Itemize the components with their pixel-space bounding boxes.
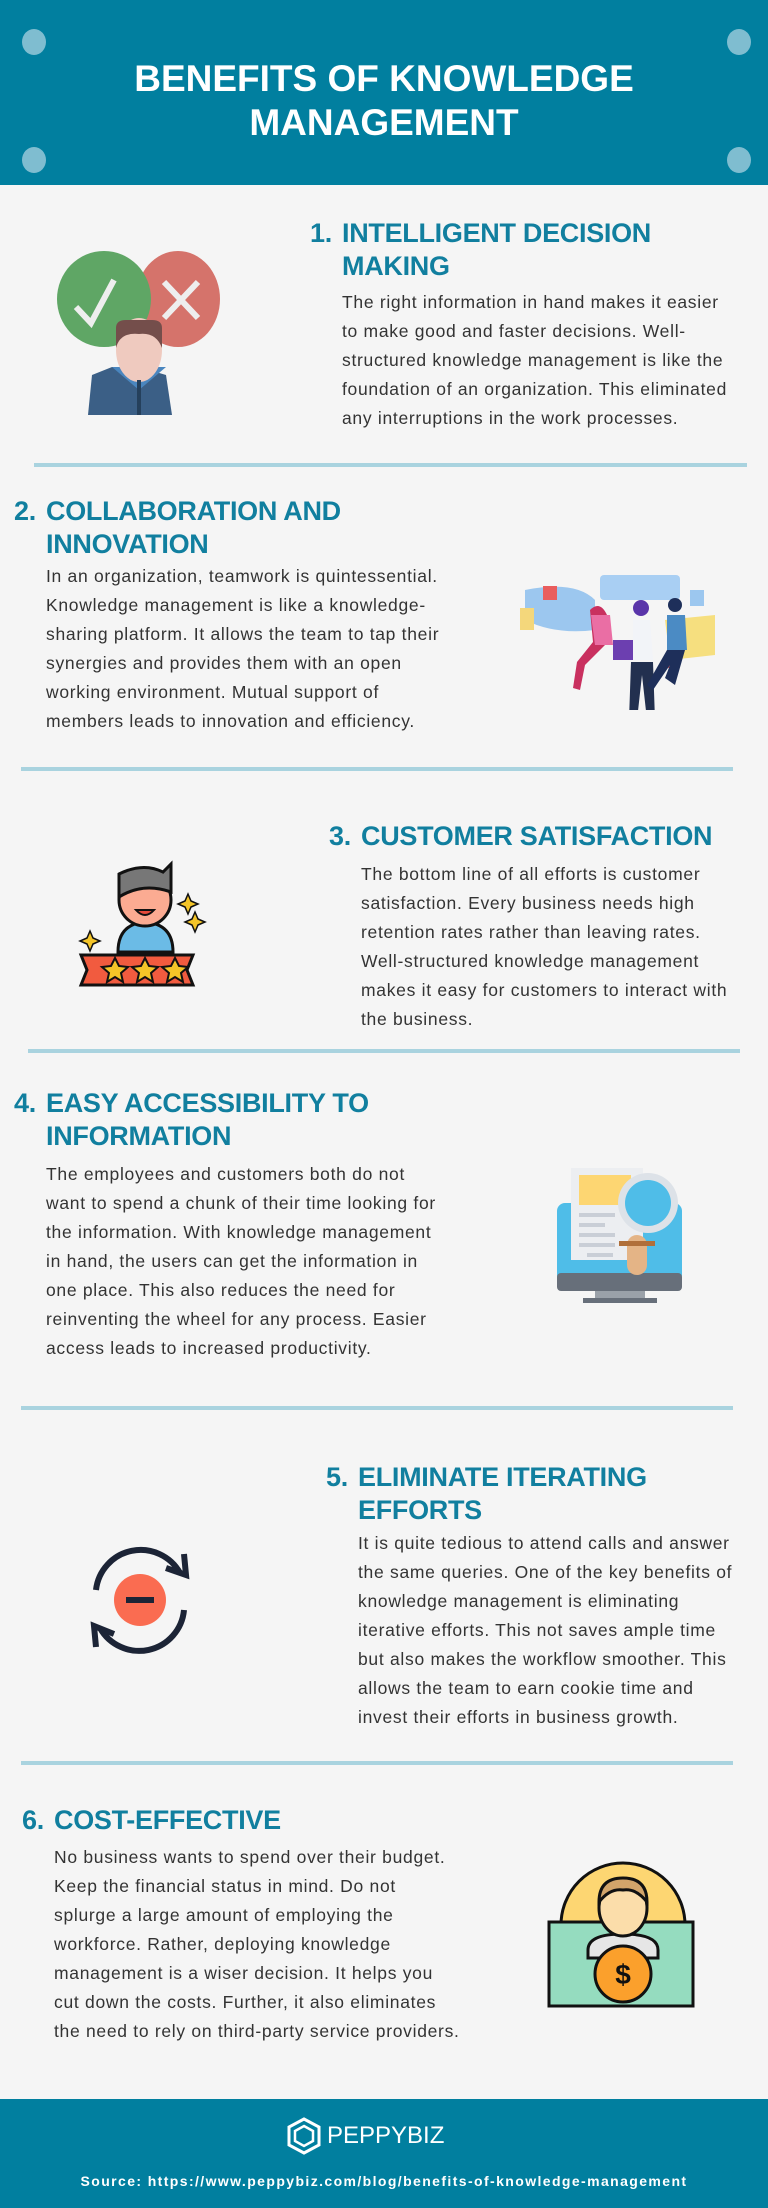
section 5 text: but also makes the workflow smoother. This bbox=[358, 1649, 727, 1669]
section 4 heading bbox=[14, 1088, 369, 1151]
section 6 text bbox=[54, 1847, 460, 2041]
section 4 text: reinventing the wheel for any process. Easier bbox=[46, 1309, 427, 1329]
section 3 icon: happy customer bbox=[78, 860, 207, 986]
source: Source: https://www.peppybiz.com/blog/benefits-of-knowledge-management bbox=[81, 2173, 687, 2189]
section 4 text bbox=[46, 1164, 436, 1358]
section 1 heading: INTELLIGENT DECISION bbox=[342, 218, 651, 248]
text: 6. bbox=[22, 1805, 44, 1835]
section 1 text: foundation of an organization. This eliminated bbox=[342, 379, 727, 399]
section 1 text: The right information in hand makes it easier bbox=[342, 292, 719, 312]
text: 5. bbox=[326, 1462, 348, 1492]
section 4 text: the information. With knowledge management bbox=[46, 1222, 431, 1242]
section 6 icon: cost person bbox=[548, 1862, 694, 2008]
section 3 text: retention rates rather than leaving rates. bbox=[361, 922, 701, 942]
section 6 heading: COST-EFFECTIVE bbox=[54, 1805, 281, 1835]
section 5 heading: ELIMINATE ITERATING bbox=[358, 1462, 647, 1492]
section 5 heading: EFFORTS bbox=[358, 1495, 482, 1525]
section 6 icon: cost person: $ bbox=[615, 1959, 631, 1990]
section 6 text: the need to rely on third-party service providers. bbox=[54, 2021, 460, 2041]
text: 2. bbox=[14, 496, 36, 526]
section 2 heading bbox=[14, 496, 341, 559]
section 1 text: to make good and faster decisions. Well- bbox=[342, 321, 686, 341]
section 1 text: any interruptions in the work processes. bbox=[342, 408, 678, 428]
section 1 text: structured knowledge management is like the bbox=[342, 350, 723, 370]
section 2 text: sharing platform. It allows the team to tap their bbox=[46, 624, 439, 644]
text: 1. bbox=[310, 218, 332, 248]
section 5 text: allows the team to earn cookie time and bbox=[358, 1678, 694, 1698]
section 6 text: management is a wiser decision. It helps you bbox=[54, 1963, 433, 1983]
section 1 heading bbox=[310, 218, 651, 281]
section 6 text: Keep the financial status in mind. Do not bbox=[54, 1876, 396, 1896]
logo: PEPPYBIZ bbox=[327, 2122, 444, 2149]
logo bbox=[288, 2117, 444, 2155]
section 4 text: want to spend a chunk of their time looking for bbox=[46, 1193, 436, 1213]
section 5 text: iterative efforts. This not saves ample time bbox=[358, 1620, 716, 1640]
section 1 icon: decision bbox=[57, 251, 220, 415]
section 5 text bbox=[358, 1533, 732, 1727]
section 5 text: knowledge management is eliminating bbox=[358, 1591, 679, 1611]
section 6 text: cut down the costs. Further, it also eliminates bbox=[54, 1992, 436, 2012]
text: 3. bbox=[329, 821, 351, 851]
section 6 text: splurge a large amount of employing the bbox=[54, 1905, 394, 1925]
section 3 text: satisfaction. Every business needs high bbox=[361, 893, 695, 913]
title: BENEFITS OF KNOWLEDGE bbox=[134, 58, 634, 99]
section 3 text: the business. bbox=[361, 1009, 473, 1029]
section 2 text: members leads to innovation and efficiency. bbox=[46, 711, 415, 731]
section 4 text: access leads to increased productivity. bbox=[46, 1338, 372, 1358]
section 3 text: Well-structured knowledge management bbox=[361, 951, 699, 971]
section 3 heading: CUSTOMER SATISFACTION bbox=[361, 821, 712, 851]
section 4 icon: monitor search bbox=[557, 1168, 682, 1303]
section 4 heading: INFORMATION bbox=[46, 1121, 231, 1151]
header banner bbox=[0, 0, 768, 185]
section 4 text: The employees and customers both do not bbox=[46, 1164, 405, 1184]
section 5 text: It is quite tedious to attend calls and answer bbox=[358, 1533, 730, 1553]
section 1 heading: MAKING bbox=[342, 251, 450, 281]
section 2 text: In an organization, teamwork is quintessential. bbox=[46, 566, 438, 586]
title: MANAGEMENT bbox=[249, 102, 519, 143]
section 2 text: Knowledge management is like a knowledge- bbox=[46, 595, 426, 615]
section 5 icon: refresh minus bbox=[90, 1546, 190, 1654]
section 2 heading: COLLABORATION AND bbox=[46, 496, 341, 526]
section 3 text bbox=[361, 864, 727, 1029]
section 3 text: The bottom line of all efforts is customer bbox=[361, 864, 700, 884]
text: 4. bbox=[14, 1088, 36, 1118]
section 4 heading: EASY ACCESSIBILITY TO bbox=[46, 1088, 369, 1118]
section 4 text: one place. This also reduces the need for bbox=[46, 1280, 395, 1300]
section 2 text: synergies and provides them with an open bbox=[46, 653, 402, 673]
section 5 text: the same queries. One of the key benefits of bbox=[358, 1562, 732, 1582]
section 2 icon: team collaboration bbox=[520, 575, 715, 710]
section 1 text bbox=[342, 292, 727, 428]
section 3 text: makes it easy for customers to interact with bbox=[361, 980, 727, 1000]
section 2 text bbox=[46, 566, 439, 731]
section 2 heading: INNOVATION bbox=[46, 529, 208, 559]
section 5 text: invest their efforts in business growth. bbox=[358, 1707, 678, 1727]
section 6 text: workforce. Rather, deploying knowledge bbox=[54, 1934, 391, 1954]
section 6 text: No business wants to spend over their budget. bbox=[54, 1847, 445, 1867]
footer bbox=[0, 2099, 768, 2208]
section 5 heading bbox=[326, 1462, 647, 1525]
section 4 text: in hand, the users can get the information in bbox=[46, 1251, 418, 1271]
title bbox=[134, 58, 634, 143]
section 2 text: working environment. Mutual support of bbox=[46, 682, 379, 702]
